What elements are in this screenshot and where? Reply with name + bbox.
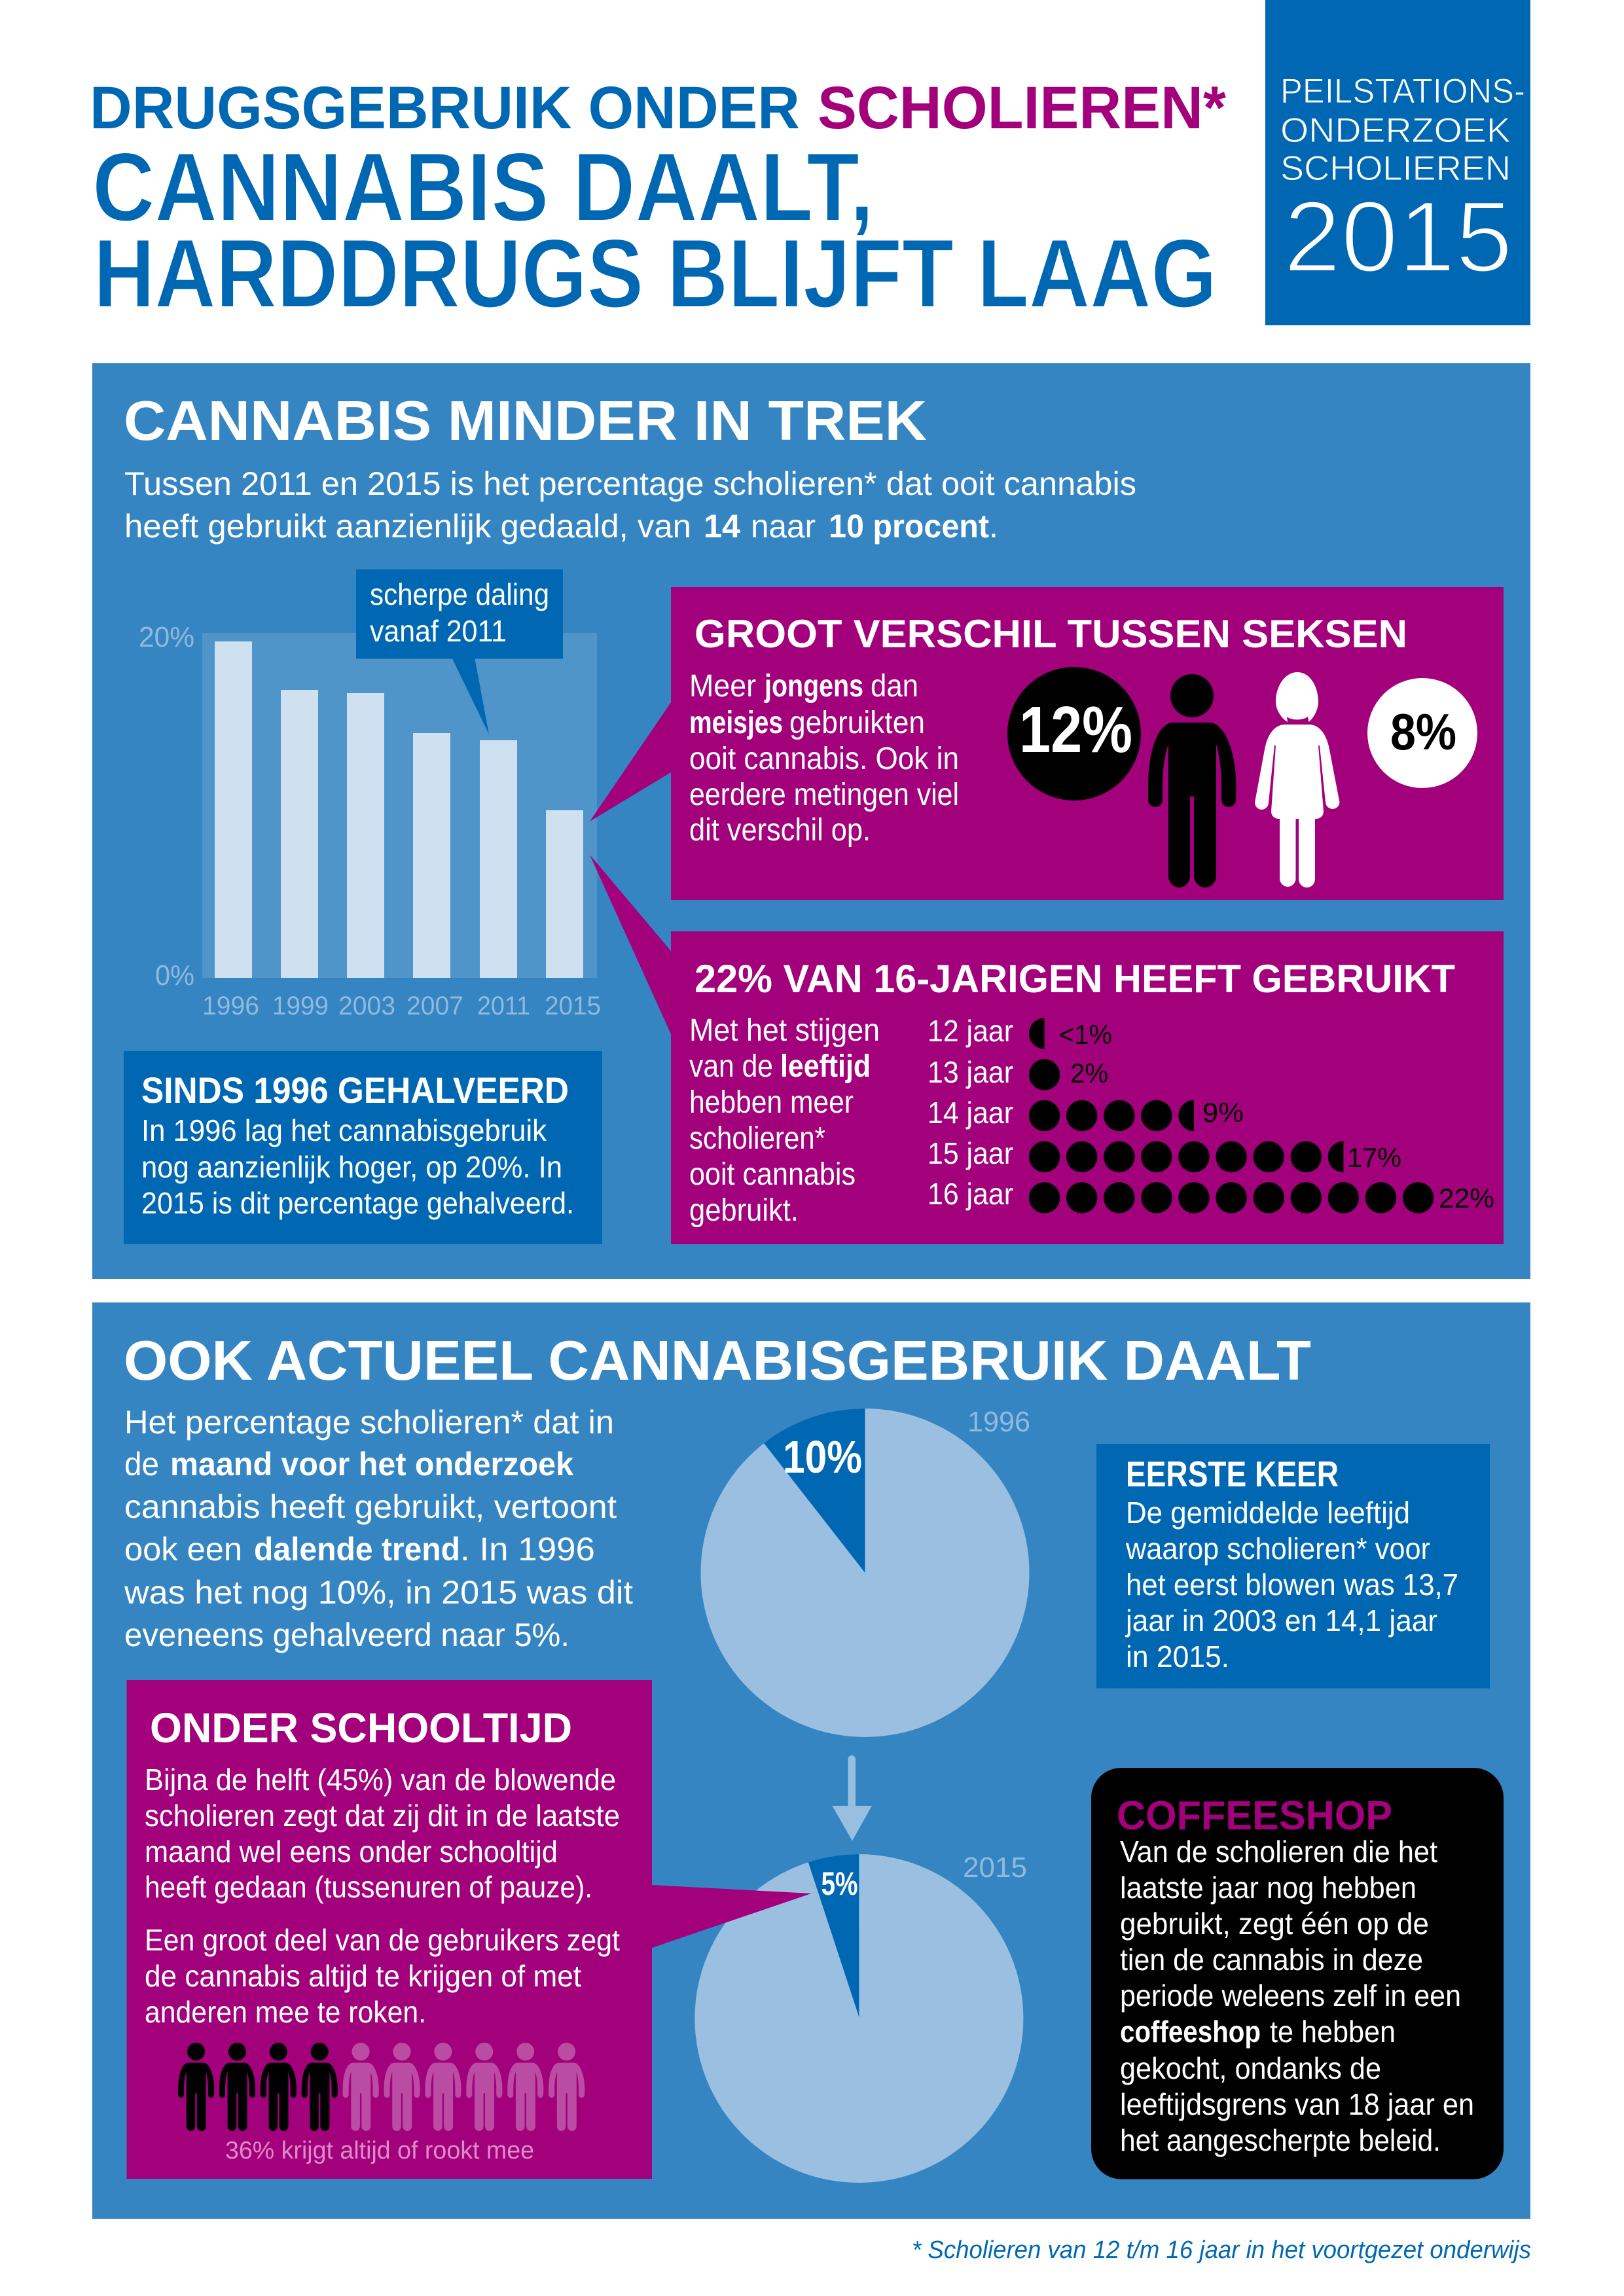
dot chart: use by age: 12 jaar (928, 1014, 1013, 1048)
text: stijgen van de leeftijd: Met het stijgen (689, 1013, 880, 1048)
stat: 12% boys: 12% (1019, 693, 1132, 766)
panel: sinds 1996 gehalveerd: 2015 is dit percentage gehalveerd. (141, 1186, 574, 1220)
dot chart: use by age: <1% (1059, 1019, 1112, 1050)
panel: onder schooltijd (127, 1680, 812, 2179)
panel: eerste keer: het eerst blowen was 13,7 (1126, 1568, 1458, 1602)
bar chart: cannabis use by year: 2015 (545, 992, 601, 1020)
text: onder schooltijd: heeft gedaan (tussenuren of pauze). (145, 1870, 592, 1904)
text: stijgen van de leeftijd: van de (689, 1049, 773, 1084)
icon: boy (1148, 674, 1236, 888)
text: stijgen van de leeftijd (689, 1013, 880, 1228)
heading: 22% van 16-jarigen: 22% VAN 16-JARIGEN HEEFT GEBRUIKT (695, 957, 1455, 1001)
text: onder schooltijd: scholieren zegt dat zij dit in de laatste (145, 1799, 620, 1833)
panel: sinds 1996 gehalveerd: In 1996 lag het cannabisgebruik (141, 1113, 547, 1147)
bar chart: cannabis use by year: 2003 (338, 992, 395, 1020)
intro text: naar (751, 508, 816, 545)
intro text (124, 1404, 633, 1653)
dot chart: use by age: 2% (1070, 1058, 1108, 1088)
caption: 36%: 36% krijgt altijd of rookt mee (225, 2137, 534, 2164)
pie chart: 1996: 1996 (967, 1406, 1030, 1438)
intro text: ook een (124, 1531, 242, 1568)
text: jongens en meisjes: jongens (764, 669, 863, 704)
dot chart: use by age: 17% (1347, 1142, 1401, 1173)
panel: coffeeshop: gebruikt, zegt één op de (1120, 1907, 1429, 1941)
panel: Peilstationsonderzoek 2015 badge: PEILSTATIONS- (1280, 72, 1525, 111)
panel: eerste keer (1096, 1444, 1490, 1689)
intro text: cannabis heeft gebruikt, vertoont (124, 1488, 617, 1525)
dot chart: use by age: 22% (1439, 1183, 1494, 1213)
text: onder schooltijd: de cannabis altijd te krijgen of met (145, 1959, 581, 1993)
arrow: 1996 to 2015 (832, 1755, 872, 1840)
text: stijgen van de leeftijd: scholieren* (689, 1121, 825, 1156)
panel: coffeeshop: laatste jaar nog hebben (1120, 1871, 1416, 1905)
text: jongens en meisjes: meisjes (689, 706, 783, 740)
intro text: was het nog 10%, in 2015 was dit (124, 1574, 633, 1611)
title: HARDDRUGS BLIJFT LAAG (94, 219, 1217, 328)
panel: cannabis minder in trek (92, 363, 1530, 1279)
intro text: 14 (704, 508, 740, 545)
dot chart: use by age: 9% (1202, 1097, 1244, 1128)
panel: ook actueel cannabisgebruik daalt (92, 1302, 1530, 2219)
panel: coffeeshop: coffeeshop (1120, 2015, 1261, 2049)
panel: Peilstationsonderzoek 2015 badge (1265, 0, 1530, 325)
panel: Peilstationsonderzoek 2015 badge: ONDERZOEK (1280, 111, 1511, 150)
text: onder schooltijd (145, 1763, 620, 2029)
callout: scherpe daling: scherpe daling (370, 577, 549, 611)
bar chart: cannabis use by year: 2007 (406, 992, 463, 1020)
stat: 8% girls: 8% (1390, 703, 1456, 761)
panel: 22% van 16-jarigen (590, 855, 1504, 1244)
panel: groot verschil tussen seksen (590, 587, 1504, 900)
text: onder schooltijd: maand wel eens onder schooltijd (145, 1835, 558, 1869)
panel: sinds 1996 gehalveerd: nog aanzienlijk hoger, op 20%. In (141, 1150, 562, 1184)
text: stijgen van de leeftijd: ooit cannabis (689, 1157, 856, 1192)
text: onder schooltijd: Een groot deel van de gebruikers zegt (145, 1923, 620, 1957)
panel: coffeeshop: leeftijdsgrens van 18 jaar en (1120, 2087, 1474, 2121)
panel: coffeeshop: periode weleens zelf in een (1120, 1979, 1461, 2013)
dot chart: use by age: 13 jaar (928, 1055, 1013, 1089)
text: jongens en meisjes (689, 669, 959, 848)
intro text (124, 465, 1136, 545)
intro text: 10 procent (829, 508, 989, 545)
text: onder schooltijd: anderen mee te roken. (145, 1995, 426, 2029)
pie chart: 1996: 10% (783, 1431, 862, 1482)
text: stijgen van de leeftijd: gebruikt. (689, 1193, 799, 1228)
panel: Peilstationsonderzoek 2015 badge: 2015 (1284, 180, 1513, 293)
intro text: eveneens gehalveerd naar 5%. (124, 1617, 569, 1653)
bar chart: cannabis use by year: 20% (139, 621, 194, 653)
panel: eerste keer: EERSTE KEER (1126, 1454, 1339, 1494)
text: jongens en meisjes: dit verschil op. (689, 813, 871, 848)
panel: eerste keer: jaar in 2003 en 14,1 jaar (1125, 1604, 1437, 1638)
intro text: maand voor het onderzoek (170, 1446, 573, 1482)
intro text: dalende trend (254, 1531, 460, 1568)
heading: cannabis minder in trek: CANNABIS MINDER IN TREK (124, 390, 927, 452)
heading: groot verschil: GROOT VERSCHIL TUSSEN SEKSEN (695, 612, 1407, 656)
intro text: . (989, 508, 998, 545)
bar chart: cannabis use by year: 2011 (477, 992, 530, 1020)
callout: scherpe daling (356, 569, 563, 734)
title: SCHOLIEREN* (818, 75, 1226, 141)
title (90, 75, 1226, 328)
text: jongens en meisjes: gebruikten (789, 706, 925, 740)
bar chart: cannabis use by year: 0% (155, 960, 194, 992)
intro text: . In 1996 (460, 1531, 595, 1568)
bar chart: cannabis use by year: 1999 (272, 992, 329, 1020)
panel: Peilstationsonderzoek 2015 badge: SCHOLIEREN (1280, 149, 1511, 188)
pie chart: 1996 (700, 1406, 1030, 1737)
dot chart: use by age: 16 jaar (928, 1177, 1013, 1211)
text: stijgen van de leeftijd: hebben meer (689, 1085, 854, 1120)
dot chart: use by age: 14 jaar (928, 1096, 1013, 1130)
panel: eerste keer: waarop scholieren* voor (1125, 1532, 1430, 1566)
panel: coffeeshop: tien de cannabis in deze (1120, 1943, 1423, 1977)
text: stijgen van de leeftijd: leeftijd (780, 1049, 871, 1084)
bar chart: cannabis use by year: 1996 (202, 992, 259, 1020)
text: onder schooltijd: Bijna de helft (45%) van de blowende (145, 1763, 616, 1797)
icon: girl (1255, 672, 1339, 888)
text: jongens en meisjes: Meer (689, 669, 756, 704)
dot chart: use by age (928, 1014, 1494, 1213)
panel: coffeeshop: te hebben (1270, 2015, 1396, 2049)
stat: 12% boys (1007, 667, 1141, 800)
text: jongens en meisjes: dan (871, 669, 918, 704)
panel: coffeeshop (1091, 1768, 1504, 2179)
panel: coffeeshop: gekocht, ondanks de (1120, 2051, 1381, 2085)
panel: coffeeshop: Van de scholieren die het (1120, 1835, 1437, 1869)
intro text: Het percentage scholieren* dat in (124, 1404, 614, 1441)
footnote: * Scholieren van 12 t/m 16 jaar in het voortgezet onderwijs (912, 2236, 1531, 2264)
dot chart: use by age: 15 jaar (928, 1136, 1013, 1170)
title: CANNABIS DAALT, (92, 132, 874, 242)
text: jongens en meisjes: ooit cannabis. Ook in (689, 742, 959, 776)
panel: eerste keer: in 2015. (1126, 1640, 1229, 1674)
heading: onder schooltijd: ONDER SCHOOLTIJD (150, 1704, 572, 1751)
intro text: heeft gebruikt aanzienlijk gedaald, van (124, 508, 691, 545)
panel: sinds 1996 gehalveerd (124, 1051, 602, 1244)
panel: coffeeshop: COFFEESHOP (1117, 1793, 1392, 1839)
intro text: de (124, 1446, 159, 1482)
pie chart: 2015: 2015 (963, 1852, 1027, 1884)
intro text: Tussen 2011 en 2015 is het percentage scholieren* dat ooit cannabis (124, 465, 1136, 502)
pictogram: 4 of 10 people (178, 2043, 585, 2131)
panel: coffeeshop: het aangescherpte beleid. (1120, 2123, 1441, 2157)
pie chart: 2015 (695, 1852, 1027, 2183)
panel: sinds 1996 gehalveerd: SINDS 1996 GEHALVEERD (141, 1069, 569, 1111)
stat: 8% girls (1367, 678, 1477, 788)
pie chart: 2015: 5% (821, 1865, 857, 1902)
heading: ook actueel: OOK ACTUEEL CANNABISGEBRUIK DAALT (124, 1330, 1311, 1392)
title: DRUGSGEBRUIK ONDER (90, 75, 800, 141)
callout: scherpe daling: vanaf 2011 (370, 614, 507, 648)
panel: eerste keer: De gemiddelde leeftijd (1126, 1496, 1410, 1530)
bar chart: cannabis use by year (139, 621, 601, 1020)
text: jongens en meisjes: eerdere metingen viel (689, 778, 959, 812)
